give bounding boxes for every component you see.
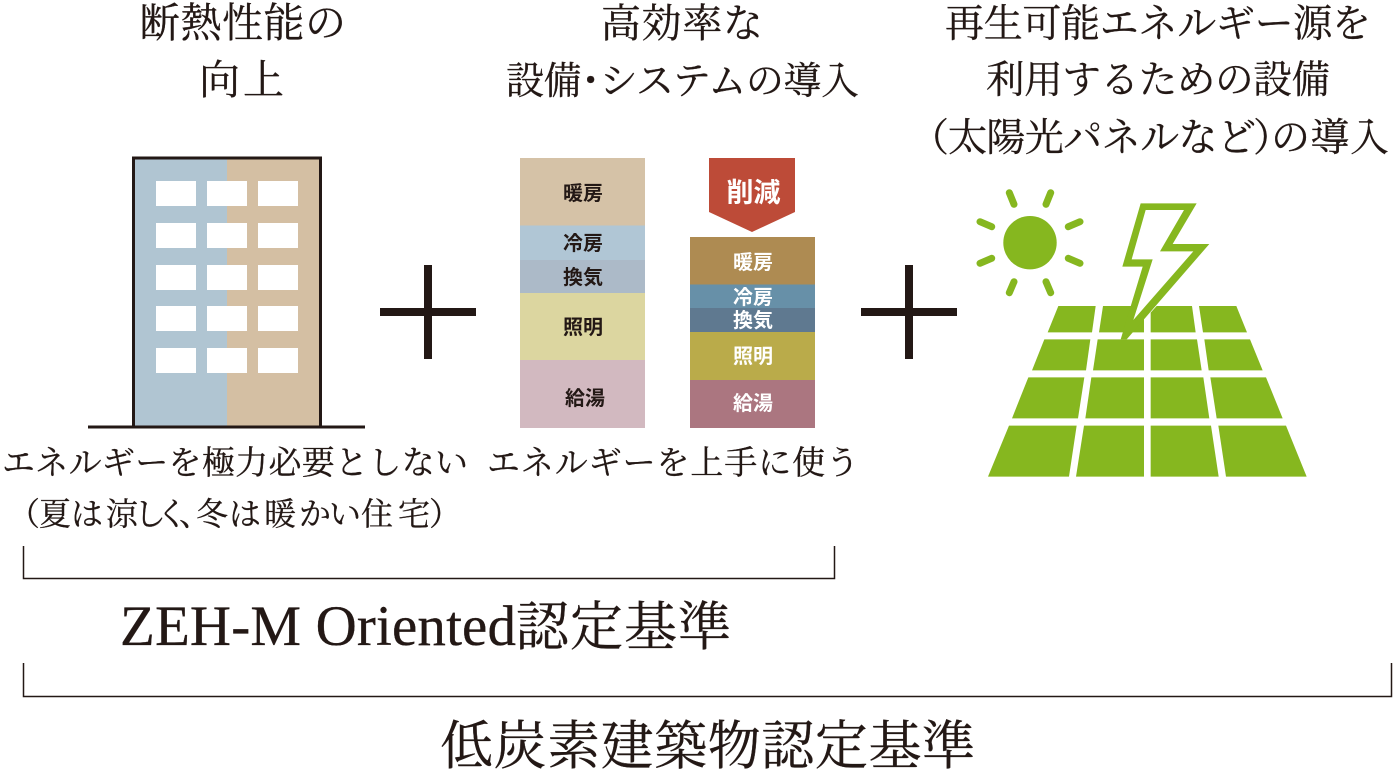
caption: efficient use: エネルギーを上手に使う (487, 445, 859, 482)
bracket: low carbon (24, 663, 1392, 696)
caption: insulation: （ (8, 496, 40, 532)
chart: energy after reduction: 暖房 (733, 251, 773, 274)
heading: insulation: 向上 (199, 57, 284, 103)
chart: energy after reduction: 照明 (733, 345, 773, 368)
heading: renewable energy: の導入 (1271, 117, 1389, 160)
icon: building (88, 158, 365, 428)
heading: insulation (139, 0, 346, 103)
caption: insulation: 夏は涼しく、冬は暖かい住宅 (39, 496, 430, 532)
heading: efficient equipment: 高効率な (601, 1, 763, 46)
label: ZEH-M Oriented: 認定基準 (516, 599, 731, 657)
caption: insulation (2, 445, 468, 532)
bracket: ZEH-M Oriented (24, 546, 834, 578)
heading: renewable energy: 再生可能エネルギー源を (945, 3, 1371, 46)
caption: insulation: ） (429, 496, 461, 532)
label: ZEH-M Oriented: ZEH-M Oriented (120, 595, 516, 658)
icon: sun (980, 193, 1080, 293)
chart: energy after reduction: 換気 (733, 309, 773, 332)
arrow: reduction (709, 158, 795, 232)
chart: energy before reduction: 冷房 (563, 232, 603, 255)
chart: energy before reduction: 暖房 (563, 182, 603, 205)
heading: renewable energy: 太陽光パネルなど (948, 117, 1256, 160)
plus sign 2 (861, 265, 957, 359)
heading: renewable energy: ） (1253, 117, 1292, 160)
icon: solar panel (988, 306, 1307, 477)
heading: insulation: 断熱性能の (139, 0, 346, 46)
chart: energy before reduction: 照明 (563, 316, 603, 339)
chart: energy after reduction (690, 237, 815, 428)
caption: insulation: エネルギーを極力必要としない (2, 445, 468, 482)
chart: energy before reduction: 給湯 (565, 387, 605, 410)
heading: efficient equipment (506, 1, 859, 103)
heading: renewable energy (910, 3, 1389, 160)
chart: energy after reduction: 給湯 (733, 392, 773, 415)
icon: lightning bolt (1121, 203, 1209, 339)
label: ZEH-M Oriented (120, 595, 731, 658)
chart: energy before reduction: 換気 (563, 266, 603, 289)
arrow: reduction: 削減 (726, 178, 780, 208)
heading: renewable energy: （ (910, 117, 949, 160)
chart: energy before reduction (520, 158, 645, 428)
heading: efficient equipment: 設備･システムの導入 (506, 61, 859, 103)
heading: renewable energy: 利用するための設備 (986, 60, 1330, 102)
plus sign 1 (380, 265, 476, 359)
chart: energy after reduction: 冷房 (733, 286, 773, 309)
